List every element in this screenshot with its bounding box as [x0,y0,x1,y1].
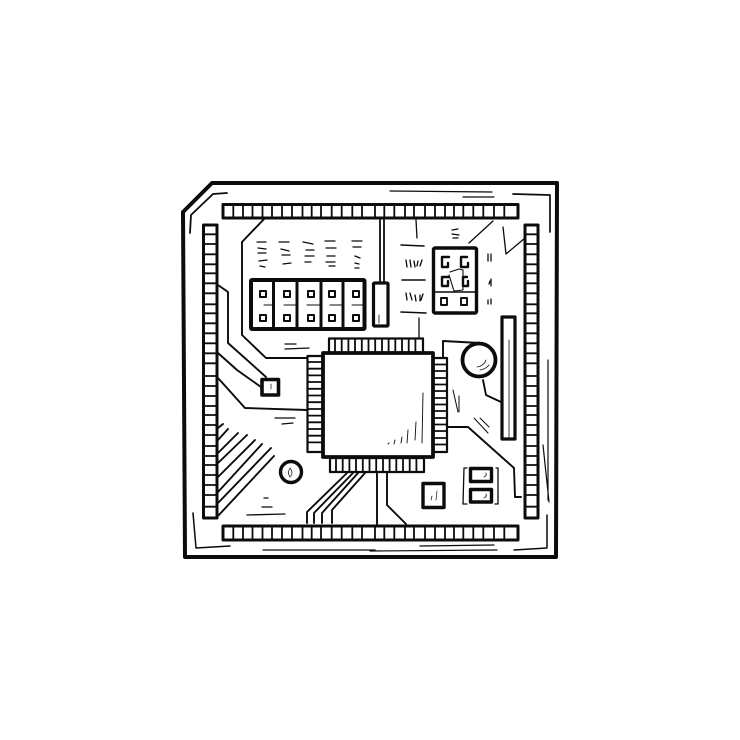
processor pins [308,338,447,472]
small circle component [280,462,302,482]
small chip [423,484,444,508]
board outline [183,183,557,557]
logic component [433,248,476,313]
connector strip: top [223,204,518,218]
long vertical bar [502,317,515,439]
processor body [323,353,433,457]
main processor [308,338,447,472]
paired resistors [463,468,498,504]
connector strip: right [525,225,538,518]
memory module [251,280,364,329]
capacitor [374,220,388,326]
circuit traces [218,218,525,525]
small square component [262,380,278,395]
small marks [247,229,491,515]
processor highlights [388,393,423,444]
diagonal hatching [217,424,274,517]
round capacitor [462,344,496,376]
connector strip: left [204,225,217,518]
connector strip: bottom [223,526,518,540]
